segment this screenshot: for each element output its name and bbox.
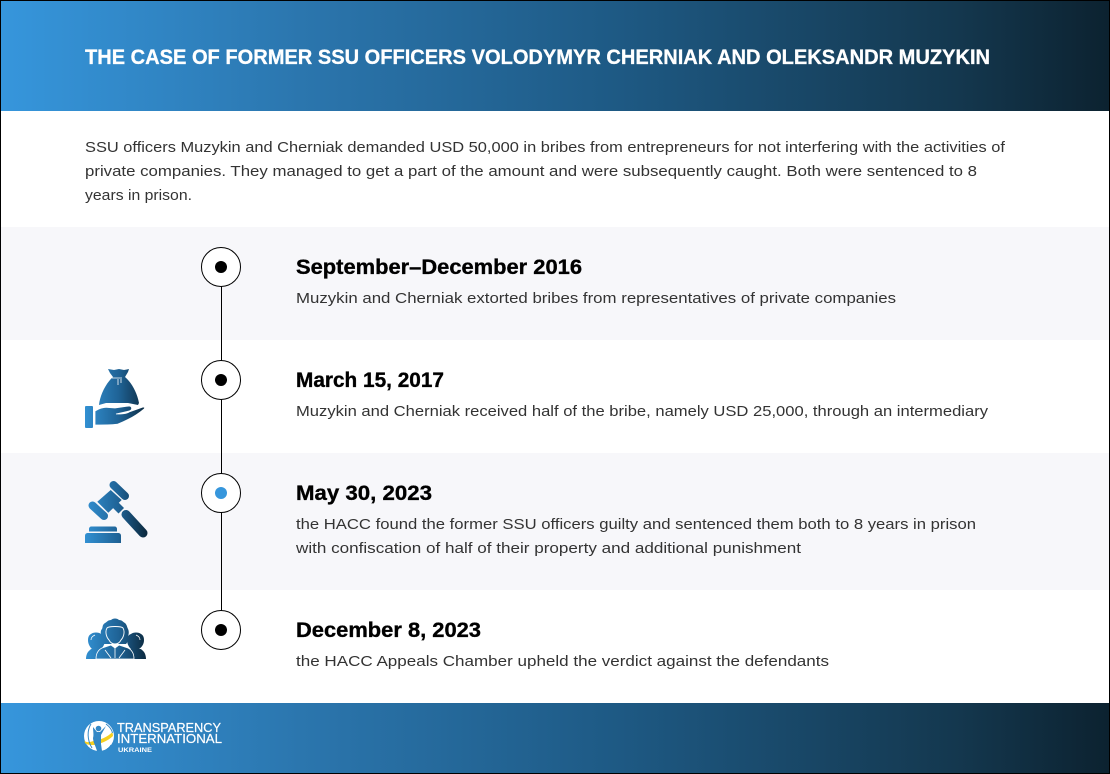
entry: March 15, 2017: Muzykin and Cherniak received half of the bribe, namely USD 25,000, through an intermediary: [296, 403, 989, 420]
logo: Transparency International Ukraine: [84, 721, 222, 754]
title: THE CASE OF FORMER SSU OFFICERS VOLODYMYR CHERNIAK AND OLEKSANDR MUZYKIN: [85, 46, 990, 69]
intro text: years in prison.: [85, 187, 192, 204]
icon: money bag in hand: [85, 369, 145, 428]
marker: March 2017: [202, 360, 240, 400]
entry: September–December 2016: [296, 256, 896, 307]
row band: May 2023: [1, 453, 1109, 590]
entry: September–December 2016: Muzykin and Cherniak extorted bribes from representatives of private companies: [296, 290, 896, 307]
intro text: SSU officers Muzykin and Cherniak demanded USD 50,000 in bribes from entrepreneurs for not interfering with the activities of: [85, 139, 1006, 156]
intro text: [85, 139, 1006, 204]
entry: December 8, 2023: the HACC Appeals Chamber upheld the verdict against the defendants: [296, 653, 829, 670]
footer banner: [1, 703, 1109, 773]
entry: May 30, 2023: [295, 482, 976, 557]
intro text: private companies. They managed to get a part of the amount and were subsequently caught. Both were sentenced to 8: [85, 163, 977, 180]
header banner: [1, 1, 1109, 111]
entry: March 15, 2017: March 15, 2017: [296, 369, 444, 392]
entry: May 30, 2023: with confiscation of half of their property and additional punishment: [295, 540, 802, 557]
icon: three judges: [86, 618, 146, 659]
row band: 2016: [1, 227, 1109, 340]
entry: May 30, 2023: the HACC found the former SSU officers guilty and sentenced them both to 8 years in prison: [296, 516, 976, 533]
entry: December 8, 2023: [296, 619, 829, 670]
timeline line: [220, 286, 222, 611]
marker: December 2023: [202, 610, 240, 650]
marker: 2016: [202, 248, 240, 286]
entry: March 15, 2017: [296, 369, 989, 420]
marker: May 2023: [202, 474, 240, 512]
logo: Transparency International Ukraine: UKRAINE: [118, 747, 153, 754]
logo: Transparency International Ukraine: TRANSPARENCY: [117, 721, 222, 735]
entry: May 30, 2023: May 30, 2023: [296, 482, 432, 505]
entry: September–December 2016: September–December 2016: [296, 256, 582, 279]
icon: judge gavel: [85, 485, 143, 543]
entry: December 8, 2023: December 8, 2023: [296, 619, 481, 642]
logo: Transparency International Ukraine: INTERNATIONAL: [117, 732, 222, 746]
